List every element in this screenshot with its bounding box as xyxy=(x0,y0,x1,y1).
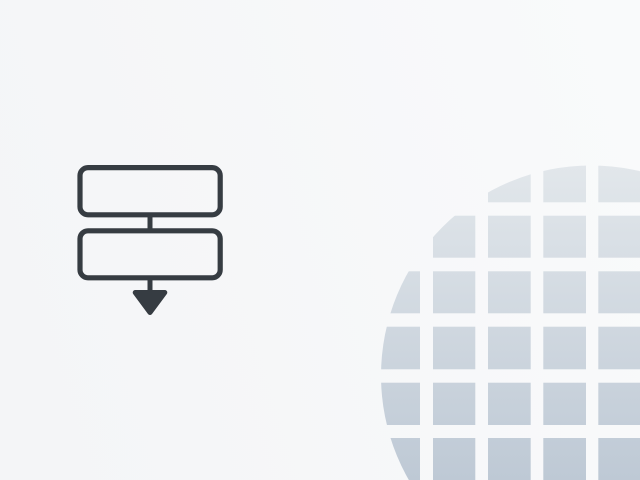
connector between blocks xyxy=(148,215,152,230)
bottom block xyxy=(80,231,220,278)
icon: stacked blocks with down arrow xyxy=(80,168,220,312)
infographic canvas xyxy=(77,165,640,480)
decorative grid disc xyxy=(378,160,640,480)
top block xyxy=(80,168,220,215)
arrow stem xyxy=(148,278,152,292)
arrow head xyxy=(135,292,165,312)
